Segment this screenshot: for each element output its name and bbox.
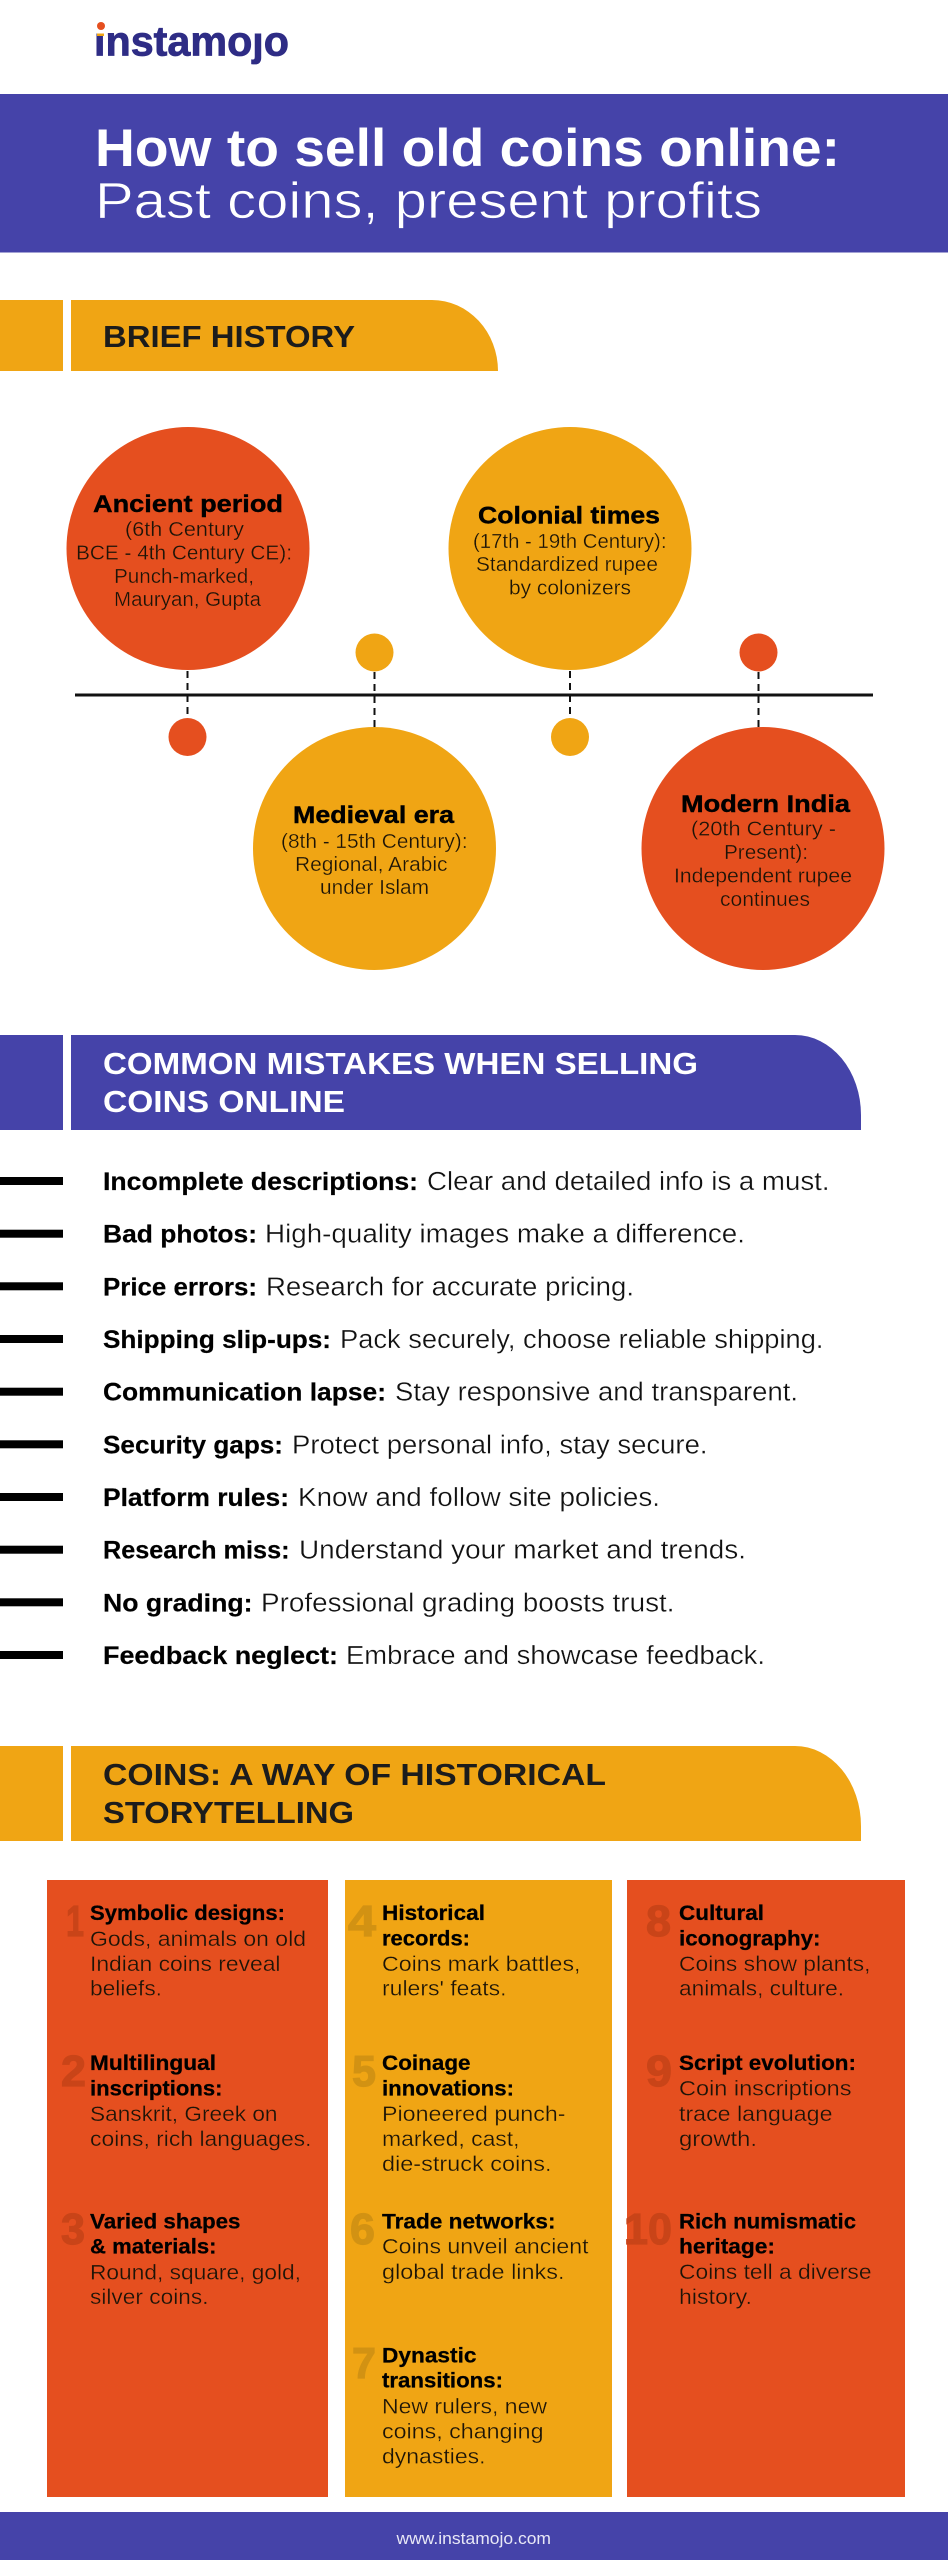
timeline circle: medieval era: under Islam bbox=[320, 876, 429, 899]
header banner bbox=[0, 94, 948, 252]
item 8: cultural iconography: Cultural bbox=[679, 1902, 764, 1925]
mistake: research miss: Understand your market and trends. bbox=[299, 1537, 746, 1565]
mistake: price errors: Price errors: bbox=[103, 1273, 257, 1301]
item 7: dynastic transitions: dynasties. bbox=[382, 2445, 486, 2468]
item 1: symbolic designs: beliefs. bbox=[90, 1978, 162, 2001]
mistake: feedback neglect: Embrace and showcase feedback. bbox=[346, 1642, 765, 1670]
item 4: historical records: Historical bbox=[382, 1902, 485, 1925]
item 2: multilingual inscriptions: 2 bbox=[61, 2047, 86, 2096]
item 8: cultural iconography: iconography: bbox=[679, 1928, 820, 1950]
section heading: historical storytelling bbox=[0, 1746, 861, 1841]
timeline marker dots bbox=[168, 634, 778, 756]
mistake: price errors bbox=[0, 1273, 634, 1301]
mistake: research miss: Research miss: bbox=[103, 1537, 290, 1565]
logo: instamojo: instamojo bbox=[94, 18, 289, 64]
timeline circle: medieval era: Medieval era bbox=[293, 802, 455, 829]
mistake: no grading: No grading: bbox=[103, 1589, 252, 1617]
item 10: rich numismatic heritage: Coins tell a diverse bbox=[679, 2261, 872, 2284]
item 5: coinage innovations: 5 bbox=[352, 2047, 376, 2096]
subtitle: Past coins, present profits bbox=[95, 172, 762, 229]
timeline circle: colonial times: Colonial times bbox=[478, 502, 660, 530]
mistake: security gaps: Protect personal info, stay secure. bbox=[292, 1431, 708, 1459]
item 4: historical records: records: bbox=[382, 1928, 470, 1950]
item 9: script evolution bbox=[646, 2047, 856, 2151]
item 5: coinage innovations: innovations: bbox=[382, 2078, 514, 2101]
item 3: varied shapes and materials: Varied shapes bbox=[90, 2210, 240, 2233]
mistake: bad photos bbox=[0, 1221, 745, 1249]
timeline circle: ancient period: BCE - 4th Century CE): bbox=[76, 542, 292, 564]
item 10: rich numismatic heritage bbox=[624, 2205, 872, 2309]
item 7: dynastic transitions bbox=[352, 2339, 548, 2468]
item 9: script evolution: Coin inscriptions bbox=[679, 2078, 852, 2101]
mistake: communication lapse: Communication lapse: bbox=[103, 1379, 386, 1407]
item 10: rich numismatic heritage: heritage: bbox=[679, 2235, 775, 2258]
item 5: coinage innovations: die-struck coins. bbox=[382, 2153, 552, 2176]
section heading: common mistakes: COINS ONLINE bbox=[103, 1084, 345, 1119]
timeline circle: modern india: continues bbox=[720, 888, 810, 911]
mistake: shipping slip-ups bbox=[0, 1326, 824, 1354]
mistake: incomplete descriptions bbox=[0, 1168, 830, 1196]
item 4: historical records: Coins mark battles, bbox=[382, 1953, 580, 1976]
item 8: cultural iconography bbox=[646, 1897, 870, 2001]
item 4: historical records: rulers' feats. bbox=[382, 1978, 506, 2001]
item 9: script evolution: 9 bbox=[646, 2047, 672, 2096]
item 1: symbolic designs bbox=[66, 1897, 306, 2001]
item 8: cultural iconography: animals, culture. bbox=[679, 1978, 844, 2001]
timeline circle: modern india: (20th Century - bbox=[691, 818, 836, 840]
mistake: communication lapse bbox=[0, 1379, 798, 1407]
item 2: multilingual inscriptions: inscriptions: bbox=[90, 2078, 222, 2101]
item 9: script evolution: growth. bbox=[679, 2128, 757, 2151]
timeline circle: ancient period: Punch-marked, bbox=[114, 565, 254, 588]
item 2: multilingual inscriptions bbox=[61, 2047, 312, 2151]
item 10: rich numismatic heritage: Rich numismatic bbox=[679, 2210, 856, 2233]
item 4: historical records: 4 bbox=[348, 1897, 377, 1946]
item 2: multilingual inscriptions: Multilingual bbox=[90, 2052, 216, 2075]
footer: www.instamojo.com bbox=[395, 2529, 551, 2548]
timeline circle: modern india bbox=[642, 727, 884, 970]
timeline circle: ancient period bbox=[66, 427, 310, 670]
item 6: trade networks bbox=[350, 2205, 589, 2284]
section heading: historical storytelling: COINS: A WAY OF HISTORICAL bbox=[103, 1757, 606, 1792]
title: How to sell old coins online: bbox=[95, 119, 840, 178]
mistake: platform rules: Platform rules: bbox=[103, 1484, 289, 1512]
item 6: trade networks: Coins unveil ancient bbox=[382, 2235, 589, 2258]
mistake: incomplete descriptions: Incomplete descriptions: bbox=[103, 1168, 418, 1196]
item 7: dynastic transitions: transitions: bbox=[382, 2370, 503, 2393]
item 3: varied shapes and materials: & materials: bbox=[90, 2235, 216, 2258]
timeline circle: medieval era: Regional, Arabic bbox=[295, 853, 448, 876]
item 2: multilingual inscriptions: Sanskrit, Greek on bbox=[90, 2103, 278, 2126]
mistake: security gaps: Security gaps: bbox=[103, 1431, 283, 1459]
item 3: varied shapes and materials: 3 bbox=[61, 2205, 85, 2254]
item 6: trade networks: 6 bbox=[350, 2205, 375, 2254]
mistake: shipping slip-ups: Shipping slip-ups: bbox=[103, 1326, 331, 1354]
item 1: symbolic designs: 1 bbox=[66, 1897, 84, 1946]
item 3: varied shapes and materials: Round, square, gold, bbox=[90, 2261, 301, 2284]
timeline circle: modern india: Present): bbox=[724, 841, 808, 864]
item 6: trade networks: Trade networks: bbox=[382, 2210, 556, 2233]
section heading: common mistakes: COMMON MISTAKES WHEN SELLING bbox=[103, 1046, 698, 1081]
mistake: research miss bbox=[0, 1537, 746, 1565]
item 5: coinage innovations: Coinage bbox=[382, 2052, 470, 2075]
mistake: incomplete descriptions: Clear and detailed info is a must. bbox=[427, 1168, 830, 1196]
item 7: dynastic transitions: Dynastic bbox=[382, 2344, 477, 2367]
timeline circle: ancient period: (6th Century bbox=[125, 518, 245, 541]
panel: column two bbox=[345, 1880, 612, 2497]
item 3: varied shapes and materials: silver coins. bbox=[90, 2286, 208, 2309]
item 5: coinage innovations: marked, cast, bbox=[382, 2128, 520, 2151]
item 5: coinage innovations: Pioneered punch- bbox=[382, 2103, 566, 2126]
section heading: historical storytelling: STORYTELLING bbox=[103, 1795, 354, 1830]
mistake: bad photos: Bad photos: bbox=[103, 1221, 257, 1249]
panel: column one bbox=[47, 1880, 328, 2497]
section heading: brief history: BRIEF HISTORY bbox=[103, 319, 355, 354]
section heading: brief history bbox=[0, 300, 498, 371]
mistake: price errors: Research for accurate pricing. bbox=[266, 1273, 634, 1301]
item 1: symbolic designs: Gods, animals on old bbox=[90, 1928, 306, 1951]
mistake: shipping slip-ups: Pack securely, choose reliable shipping. bbox=[340, 1326, 824, 1354]
timeline circle: colonial times bbox=[448, 427, 692, 670]
item 4: historical records bbox=[348, 1897, 580, 2001]
mistake: no grading bbox=[0, 1589, 674, 1617]
timeline axis and connectors bbox=[75, 671, 873, 727]
panel: column three bbox=[624, 1880, 905, 2497]
item 1: symbolic designs: Symbolic designs: bbox=[90, 1902, 285, 1925]
item 1: symbolic designs: Indian coins reveal bbox=[90, 1953, 280, 1976]
timeline circle: colonial times: (17th - 19th Century): bbox=[473, 530, 666, 553]
timeline circle: modern india: Modern India bbox=[681, 791, 851, 818]
timeline circle: medieval era: (8th - 15th Century): bbox=[281, 830, 468, 853]
timeline circle: ancient period: Ancient period bbox=[93, 491, 283, 518]
item 7: dynastic transitions: 7 bbox=[352, 2339, 376, 2388]
section heading: common mistakes bbox=[0, 1035, 861, 1130]
item 3: varied shapes and materials bbox=[61, 2205, 301, 2309]
mistakes list bbox=[0, 1168, 830, 1670]
mistake: platform rules bbox=[0, 1484, 660, 1512]
mistake: bad photos: High-quality images make a difference. bbox=[265, 1221, 745, 1249]
timeline circle: ancient period: Mauryan, Gupta bbox=[114, 588, 262, 611]
item 7: dynastic transitions: New rulers, new bbox=[382, 2395, 548, 2418]
timeline circle: colonial times: Standardized rupee bbox=[476, 553, 658, 576]
item 10: rich numismatic heritage: history. bbox=[679, 2286, 752, 2309]
item 2: multilingual inscriptions: coins, rich languages. bbox=[90, 2128, 312, 2151]
mistake: feedback neglect bbox=[0, 1642, 765, 1670]
timeline circle: modern india: Independent rupee bbox=[674, 864, 852, 888]
timeline circle: medieval era bbox=[253, 727, 496, 970]
item 6: trade networks: global trade links. bbox=[382, 2261, 564, 2284]
item 8: cultural iconography: 8 bbox=[646, 1897, 671, 1946]
mistake: no grading: Professional grading boosts trust. bbox=[261, 1589, 674, 1617]
timeline circle: colonial times: by colonizers bbox=[509, 576, 631, 600]
mistake: communication lapse: Stay responsive and transparent. bbox=[395, 1379, 798, 1407]
item 5: coinage innovations bbox=[352, 2047, 566, 2176]
mistake: feedback neglect: Feedback neglect: bbox=[103, 1642, 338, 1670]
mistake: platform rules: Know and follow site policies. bbox=[298, 1484, 660, 1512]
item 9: script evolution: Script evolution: bbox=[679, 2052, 856, 2075]
item 8: cultural iconography: Coins show plants, bbox=[679, 1953, 870, 1976]
item 7: dynastic transitions: coins, changing bbox=[382, 2420, 544, 2443]
item 10: rich numismatic heritage: 10 bbox=[624, 2205, 672, 2254]
mistake: security gaps bbox=[0, 1431, 708, 1459]
footer bbox=[0, 2512, 948, 2560]
item 9: script evolution: trace language bbox=[679, 2103, 832, 2126]
